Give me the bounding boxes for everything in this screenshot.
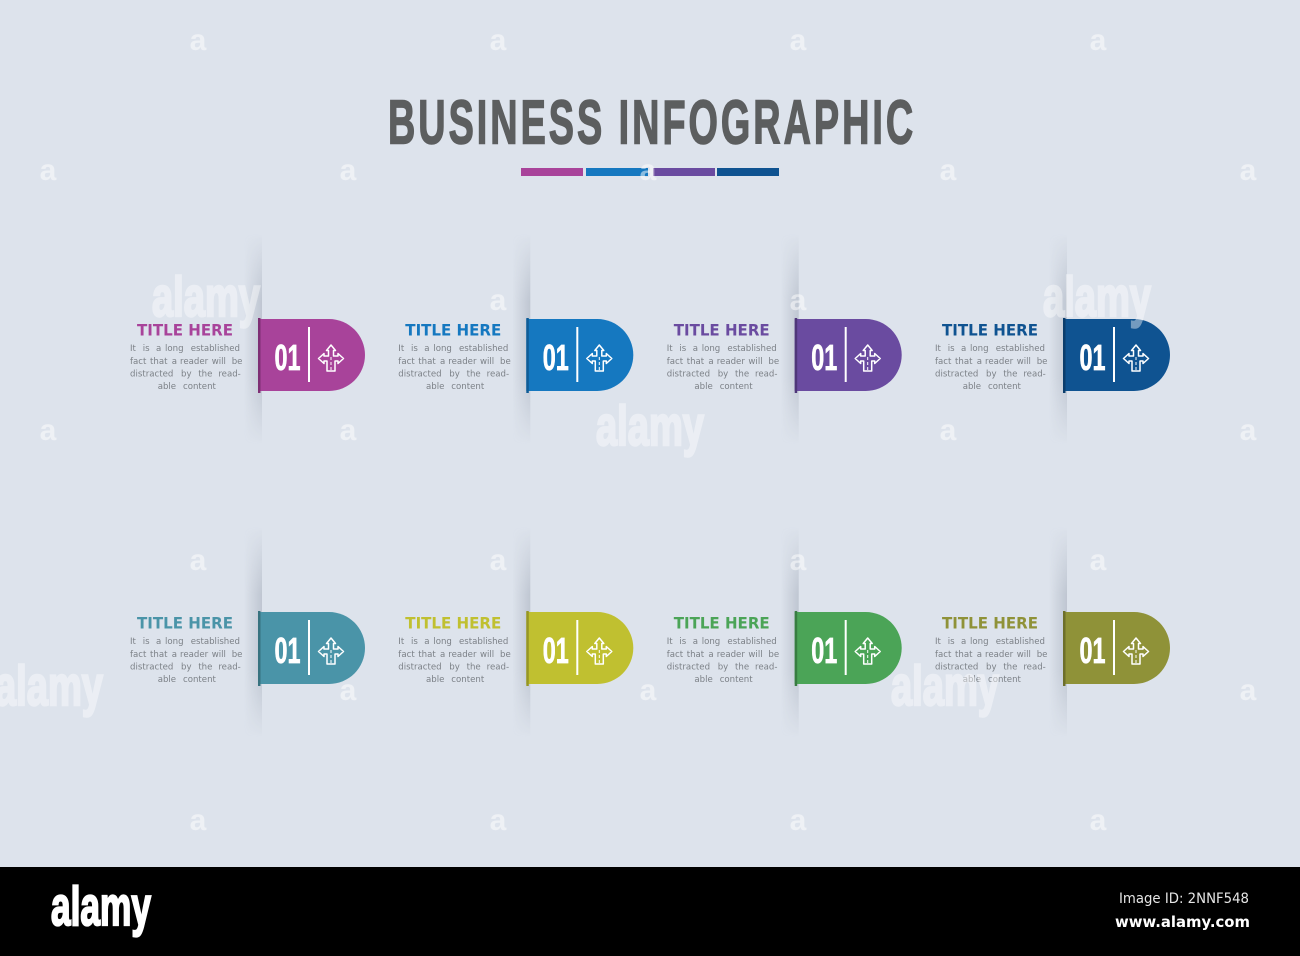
step 6 description: the	[467, 662, 481, 672]
step 1 description: is	[143, 344, 150, 354]
step 6 description: by	[449, 662, 460, 672]
step 3 description: will	[748, 357, 763, 367]
step 8 description: long	[970, 637, 989, 647]
step 1 description: a	[172, 357, 177, 367]
step 2 icon	[587, 345, 612, 371]
step 6 number: 01	[543, 630, 569, 671]
watermark pattern: a	[640, 674, 657, 707]
step 3 description: reader	[717, 357, 745, 367]
step 8 description: will	[1017, 650, 1031, 660]
step 1 icon	[318, 345, 344, 371]
step 3 description: content	[720, 382, 753, 392]
step 6 title: TITLE HERE	[405, 614, 501, 632]
watermark pattern: a	[340, 154, 357, 187]
step 1 description: content	[183, 382, 217, 392]
step 6 description: will	[480, 650, 494, 660]
step 2 description: will	[480, 357, 494, 367]
step 2 description: established	[459, 344, 508, 354]
step 7 description: by	[718, 662, 728, 672]
step 2 number: 01	[543, 337, 569, 378]
step 4 description: will	[1017, 357, 1031, 367]
step 1 description: reader	[180, 357, 209, 367]
step 3 description: the	[735, 370, 749, 380]
step 7 description: established	[727, 637, 777, 647]
step 2	[398, 252, 634, 426]
step 4	[935, 252, 1170, 426]
step 5 description: content	[183, 675, 217, 685]
watermark pattern: a	[940, 154, 957, 187]
step 5 description: distracted	[130, 662, 173, 672]
step 4 description: a	[961, 344, 966, 354]
step 7 description: the	[735, 662, 749, 672]
step 5 description: long	[165, 637, 184, 647]
step 3 description: long	[702, 344, 720, 354]
image id: Image ID: 2NNF548	[1119, 891, 1249, 907]
step 8 description: a	[961, 637, 966, 647]
step 7 title: TITLE HERE	[674, 614, 770, 632]
step 1 description: able	[158, 382, 176, 392]
step 8 description: fact	[935, 650, 952, 660]
step 6 description: a	[424, 637, 430, 647]
step 6	[398, 546, 634, 718]
step 3 description: fact	[667, 357, 684, 367]
step 7 description: a	[693, 637, 698, 647]
watermark pattern: alamy	[891, 654, 999, 717]
step 4 description: able	[963, 382, 981, 392]
step 5 description: be	[232, 650, 242, 660]
step 3 description: a	[693, 344, 698, 354]
step 5 icon	[318, 638, 344, 664]
watermark pattern: alamy	[1043, 265, 1151, 328]
step 4 description: read-	[1023, 370, 1046, 380]
step 4 description: that	[955, 357, 973, 367]
step 7 description: reader	[717, 650, 745, 660]
step 3 description: It	[667, 344, 673, 354]
watermark pattern: a	[190, 804, 207, 837]
step 5 description: a	[172, 650, 177, 660]
footer logo: alamy	[51, 875, 151, 937]
step 3 icon	[855, 345, 880, 371]
step 3 description	[667, 344, 779, 392]
step 2 description: a	[424, 344, 430, 354]
website: www.alamy.com	[1115, 913, 1250, 931]
step 8 description: It	[935, 637, 942, 647]
title underline bars	[521, 168, 779, 176]
step 8 title: TITLE HERE	[942, 614, 1038, 632]
step 7 description: a	[708, 650, 714, 660]
step 8 number: 01	[1080, 630, 1106, 671]
watermark pattern: a	[1240, 154, 1257, 187]
step 2 description: the	[467, 370, 481, 380]
step 7 description: distracted	[667, 662, 710, 672]
step 4 description: reader	[985, 357, 1014, 367]
step 4 description: distracted	[935, 370, 978, 380]
watermark pattern: a	[790, 804, 807, 837]
watermark pattern: a	[1090, 544, 1107, 577]
step 8 description: that	[955, 650, 973, 660]
step 5 description: able	[158, 675, 176, 685]
step 8 description	[935, 637, 1047, 685]
step 6 description: be	[500, 650, 511, 660]
step 6 description: content	[451, 675, 485, 685]
step 7 icon	[855, 638, 880, 664]
step 3 number: 01	[811, 337, 837, 378]
step 1 tab	[258, 318, 365, 393]
step 4 description: fact	[935, 357, 952, 367]
title: BUSINESS INFOGRAPHIC	[388, 88, 913, 157]
step 5 title: TITLE HERE	[137, 614, 233, 632]
watermark pattern: a	[490, 544, 507, 577]
watermark pattern: a	[190, 24, 207, 57]
step 6 description: read-	[487, 662, 509, 672]
watermark pattern: a	[1090, 24, 1107, 57]
step 8 description: reader	[985, 650, 1014, 660]
step 5 description: the	[198, 662, 212, 672]
watermark pattern: a	[1240, 414, 1257, 447]
step 6 tab	[526, 611, 633, 686]
step 4 description: by	[986, 370, 997, 380]
step 3	[666, 252, 902, 426]
step 1 number: 01	[274, 337, 300, 378]
step 8 description: the	[1003, 662, 1017, 672]
step 5 description: will	[212, 650, 226, 660]
step 6 description: distracted	[398, 662, 442, 672]
watermark pattern: a	[40, 414, 57, 447]
step 7 description: It	[667, 637, 673, 647]
step 3 description: that	[687, 357, 705, 367]
step 4 description	[935, 344, 1047, 392]
watermark pattern: a	[490, 24, 507, 57]
step 8 icon	[1124, 638, 1148, 664]
step 1 description: a	[156, 344, 161, 354]
step 8 description: is	[948, 637, 955, 647]
step 6 description: It	[398, 637, 405, 647]
step 4 description: content	[988, 382, 1022, 392]
step 8 description: be	[1037, 650, 1047, 660]
step 4 icon	[1124, 345, 1148, 371]
step 6 description: fact	[398, 650, 415, 660]
step 8 description: by	[986, 662, 997, 672]
step 2 title: TITLE HERE	[405, 320, 501, 340]
step 3 description: by	[718, 370, 728, 380]
step 2 description: distracted	[398, 370, 442, 380]
step 1 description: It	[130, 344, 137, 354]
step 3 description: a	[708, 357, 714, 367]
step 6 description: able	[426, 675, 444, 685]
step 8 description: read-	[1023, 662, 1046, 672]
step 5 description: reader	[180, 650, 209, 660]
step 7 description: long	[702, 637, 720, 647]
step 7 description: able	[694, 675, 713, 685]
step 3 description: able	[694, 382, 713, 392]
watermark pattern: a	[790, 284, 807, 317]
step 3 title: TITLE HERE	[674, 320, 770, 340]
step 7 description: that	[687, 650, 705, 660]
step 5 description: that	[150, 650, 168, 660]
watermark pattern: a	[1090, 804, 1107, 837]
step 4 description: It	[935, 344, 942, 354]
step 6 description: established	[459, 637, 508, 647]
step 7 number: 01	[811, 630, 837, 671]
step 6 description: that	[418, 650, 436, 660]
step 3 description: be	[768, 357, 779, 367]
step 7 description: be	[768, 650, 779, 660]
step 1 description: be	[232, 357, 242, 367]
step 5 description	[130, 637, 242, 685]
step 1 description: established	[191, 344, 240, 354]
step 8 description: able	[963, 675, 981, 685]
step 1 description: fact	[130, 357, 147, 367]
step 2 description: It	[398, 344, 405, 354]
step 1 description: the	[198, 370, 212, 380]
step 6 description: reader	[448, 650, 477, 660]
step 6 description: long	[433, 637, 452, 647]
watermark pattern: a	[640, 154, 657, 187]
step 7	[666, 546, 902, 718]
watermark pattern: alamy	[152, 265, 260, 328]
step 5 description: fact	[130, 650, 147, 660]
step 7 description: fact	[667, 650, 684, 660]
step 5 description: a	[156, 637, 161, 647]
step 8 description: a	[977, 650, 982, 660]
watermark pattern: a	[40, 154, 57, 187]
step 2 tab	[526, 318, 633, 393]
step 3 description: established	[727, 344, 777, 354]
step 2 description: that	[418, 357, 436, 367]
step 1 description: will	[212, 357, 226, 367]
watermark pattern: a	[340, 414, 357, 447]
step 4 description: long	[970, 344, 989, 354]
step 2 description: reader	[448, 357, 477, 367]
step 7 description	[667, 637, 779, 685]
footer bar	[0, 867, 1300, 956]
step 2 description: read-	[487, 370, 509, 380]
watermark pattern: a	[940, 414, 957, 447]
watermark pattern: a	[340, 674, 357, 707]
step 5 tab	[258, 611, 365, 686]
step 5 description: is	[143, 637, 150, 647]
step 8	[935, 545, 1170, 719]
step 2 description: long	[433, 344, 452, 354]
step 5	[130, 545, 365, 719]
step 4 description: established	[996, 344, 1045, 354]
step 2 description: is	[411, 344, 418, 354]
watermark pattern: a	[790, 544, 807, 577]
step 3 tab	[795, 318, 902, 393]
watermark pattern: a	[790, 24, 807, 57]
step 1	[130, 252, 365, 426]
step 2 description: content	[451, 382, 485, 392]
step 4 title: TITLE HERE	[942, 320, 1038, 340]
step 7 description: will	[748, 650, 763, 660]
step 1 description: long	[165, 344, 184, 354]
step 8 tab	[1063, 611, 1170, 686]
watermark pattern: a	[490, 284, 507, 317]
step 1 title: TITLE HERE	[137, 320, 233, 340]
step 7 description: is	[679, 637, 687, 647]
step 3 description: is	[679, 344, 687, 354]
step 2 description: be	[500, 357, 511, 367]
step 1 description: that	[150, 357, 168, 367]
step 1 description: by	[181, 370, 192, 380]
step 7 tab	[795, 611, 902, 686]
step 4 description: is	[948, 344, 955, 354]
step 5 description: read-	[218, 662, 241, 672]
step 5 number: 01	[274, 630, 300, 671]
step 3 description: read-	[755, 370, 777, 380]
step 7 description: content	[720, 675, 753, 685]
step 6 description	[398, 637, 511, 685]
step 5 description: It	[130, 637, 137, 647]
step 6 description: is	[411, 637, 418, 647]
step 1 description: distracted	[130, 370, 173, 380]
watermark pattern: a	[190, 544, 207, 577]
step 6 icon	[587, 638, 612, 664]
step 4 tab	[1063, 318, 1170, 393]
step 7 description: read-	[755, 662, 777, 672]
step 4 number: 01	[1080, 337, 1106, 378]
step 8 description: established	[996, 637, 1045, 647]
step 5 description: established	[191, 637, 240, 647]
step 2 description: a	[440, 357, 445, 367]
watermark pattern: alamy	[596, 394, 704, 457]
step 3 description: distracted	[667, 370, 710, 380]
step 6 description: a	[440, 650, 445, 660]
step 8 description: content	[988, 675, 1022, 685]
step 5 description: by	[181, 662, 192, 672]
step 1 description	[130, 344, 242, 392]
step 2 description: by	[449, 370, 460, 380]
step 2 description: able	[426, 382, 444, 392]
step 2 description: fact	[398, 357, 415, 367]
step 2 description	[398, 344, 511, 392]
step 4 description: be	[1037, 357, 1047, 367]
watermark pattern: a	[490, 804, 507, 837]
step 8 description: distracted	[935, 662, 978, 672]
step 4 description: the	[1003, 370, 1017, 380]
watermark pattern: a	[1240, 674, 1257, 707]
step 4 description: a	[977, 357, 982, 367]
step 1 description: read-	[218, 370, 241, 380]
